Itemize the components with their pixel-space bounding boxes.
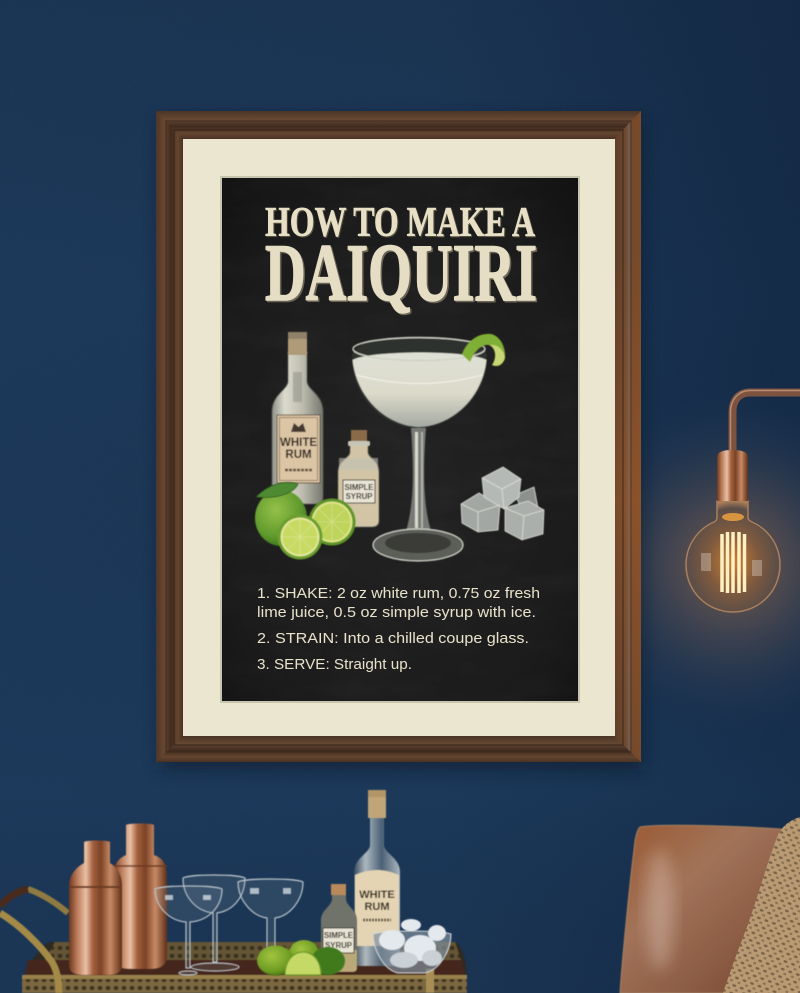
title: daiquiri: DAIQUIRI	[265, 227, 537, 318]
tall copper shaker	[113, 824, 167, 969]
step 2: 2. STRAIN: Into a chilled coupe glass.	[257, 631, 529, 647]
leather highlight	[646, 850, 674, 970]
leather armchair	[620, 825, 800, 993]
bowl of ice	[373, 919, 451, 973]
frame drop shadow	[160, 118, 642, 770]
title: daiquiri: DAIQUIRI	[266, 228, 538, 320]
step 1: 1. SHAKE: 2 oz white rum, 0.75 oz fresh	[257, 586, 540, 602]
cream mat board	[183, 139, 615, 736]
rum bottle label text: RUM	[285, 449, 312, 461]
coupe glasses on cart	[155, 875, 303, 975]
bar cart rail	[22, 942, 467, 993]
cart syrup label text: SYRUP	[325, 941, 352, 950]
illustration: ice cubes	[461, 467, 544, 540]
knitted throw blanket	[723, 817, 800, 993]
cart syrup bottle	[321, 884, 357, 972]
wooden picture frame	[156, 111, 641, 762]
cart bottle of white rum	[354, 790, 400, 966]
syrup label text: SIMPLE	[344, 483, 374, 492]
recipe steps	[257, 586, 540, 673]
cart handle	[0, 889, 68, 993]
title: how to make a: HOW TO MAKE A	[265, 200, 536, 246]
illustration: lime twist garnish	[462, 334, 505, 366]
small copper shaker	[69, 840, 122, 975]
cart rum label text: RUM	[364, 901, 390, 913]
chalkboard poster	[222, 178, 578, 701]
illustration: simple syrup bottle	[338, 430, 379, 527]
step 1: lime juice, 0.5 oz simple syrup with ice.	[257, 605, 536, 621]
title: daiquiri	[265, 227, 538, 320]
syrup label text: SYRUP	[346, 492, 372, 501]
rum bottle label text: WHITE	[280, 437, 317, 449]
copper wall lamp	[686, 390, 800, 612]
cart rum label text: WHITE	[359, 889, 395, 901]
lamp filament	[722, 513, 744, 593]
illustration: coupe glass	[352, 337, 487, 561]
cart syrup label text: SIMPLE	[324, 931, 353, 940]
step 3: 3. SERVE: Straight up.	[257, 657, 412, 673]
illustration: limes	[255, 483, 356, 560]
title: how to make a: HOW TO MAKE A	[266, 201, 537, 247]
illustration: white rum bottle	[272, 332, 323, 504]
limes on cart	[257, 940, 345, 976]
